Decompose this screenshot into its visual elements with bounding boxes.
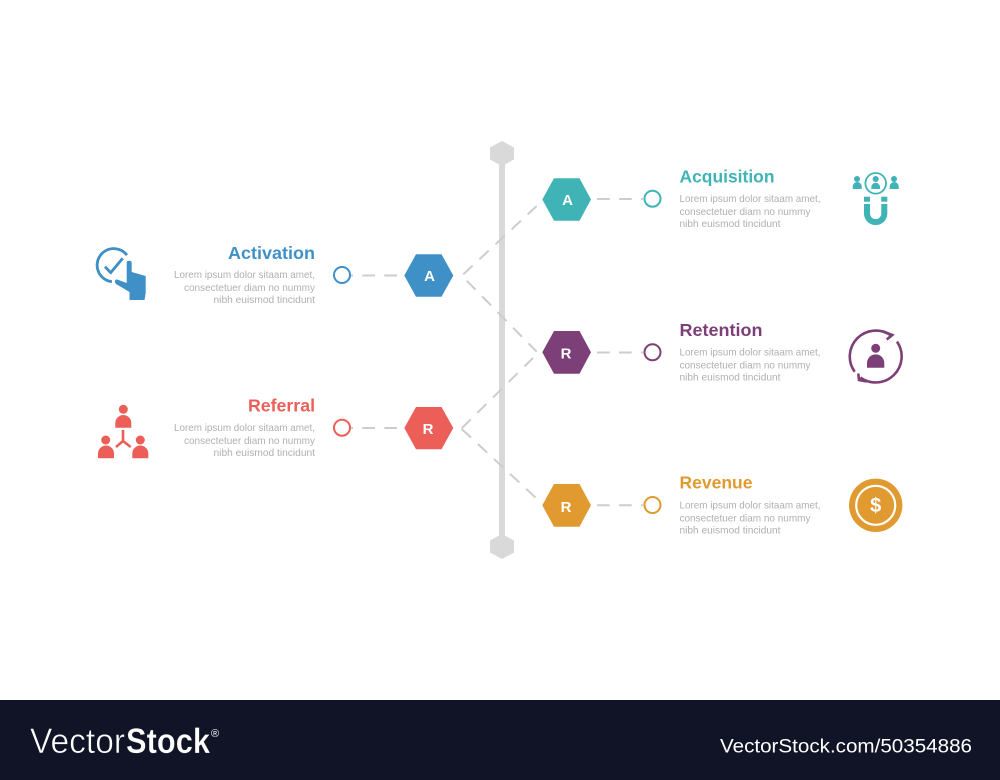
node: Retention	[542, 331, 660, 374]
text: Activation: consectetuer diam no nummy	[184, 282, 316, 294]
icon: referral people network	[98, 405, 148, 458]
icon: hand tapping check mark	[97, 249, 146, 300]
footer band	[0, 700, 1000, 780]
text: Referral	[174, 396, 316, 459]
text: Acquisition: Acquisition	[680, 166, 774, 186]
footer logo: Vector	[30, 722, 125, 761]
node: Acquisition: A	[562, 192, 573, 209]
node: Revenue: R	[561, 499, 572, 516]
icon: dollar coin: $	[870, 495, 881, 517]
node: Activation: A	[424, 268, 435, 285]
text: Revenue	[680, 472, 820, 536]
icon: dollar coin	[849, 479, 902, 532]
dashed connectors	[351, 199, 643, 505]
text: Activation: Activation	[228, 243, 315, 263]
text: Acquisition	[680, 166, 820, 230]
text: Referral: nibh euismod tincidunt	[214, 447, 315, 459]
node: Referral	[334, 407, 453, 449]
icon: retention person with cycle arrows	[850, 331, 902, 382]
footer logo	[30, 722, 219, 761]
text: Referral: Lorem ipsum dolor sitaam amet,	[174, 422, 315, 434]
text: Acquisition: consectetuer diam no nummy	[680, 206, 811, 218]
text: Revenue: Revenue	[680, 472, 753, 492]
text: Activation	[174, 243, 316, 306]
node: Acquisition	[542, 178, 660, 221]
text: Retention: Lorem ipsum dolor sitaam amet,	[680, 346, 820, 358]
node: Revenue	[542, 484, 660, 527]
text: Referral: consectetuer diam no nummy	[184, 435, 316, 447]
text: Referral: Referral	[248, 396, 315, 416]
central vertical axis	[490, 141, 514, 559]
text: Activation: nibh euismod tincidunt	[214, 294, 315, 306]
text: Acquisition: nibh euismod tincidunt	[680, 218, 781, 230]
node: Retention: R	[561, 346, 572, 362]
footer image id: VectorStock.com/50354886	[720, 736, 972, 758]
text: Revenue: consectetuer diam no nummy	[680, 512, 811, 524]
text: Retention: Retention	[680, 320, 762, 340]
node: Referral: R	[423, 421, 434, 438]
icon: magnet attracting people	[853, 173, 899, 225]
text: Activation: Lorem ipsum dolor sitaam amet,	[174, 269, 315, 281]
text: Retention: nibh euismod tincidunt	[680, 372, 781, 384]
text: Acquisition: Lorem ipsum dolor sitaam amet,	[680, 193, 820, 205]
text: Retention: consectetuer diam no nummy	[680, 360, 811, 372]
footer logo: ®	[211, 728, 219, 740]
footer logo: Stock	[126, 722, 210, 761]
text: Revenue: nibh euismod tincidunt	[680, 524, 781, 536]
node: Activation	[334, 254, 453, 297]
text: Revenue: Lorem ipsum dolor sitaam amet,	[680, 500, 820, 512]
text: Retention	[680, 320, 820, 384]
